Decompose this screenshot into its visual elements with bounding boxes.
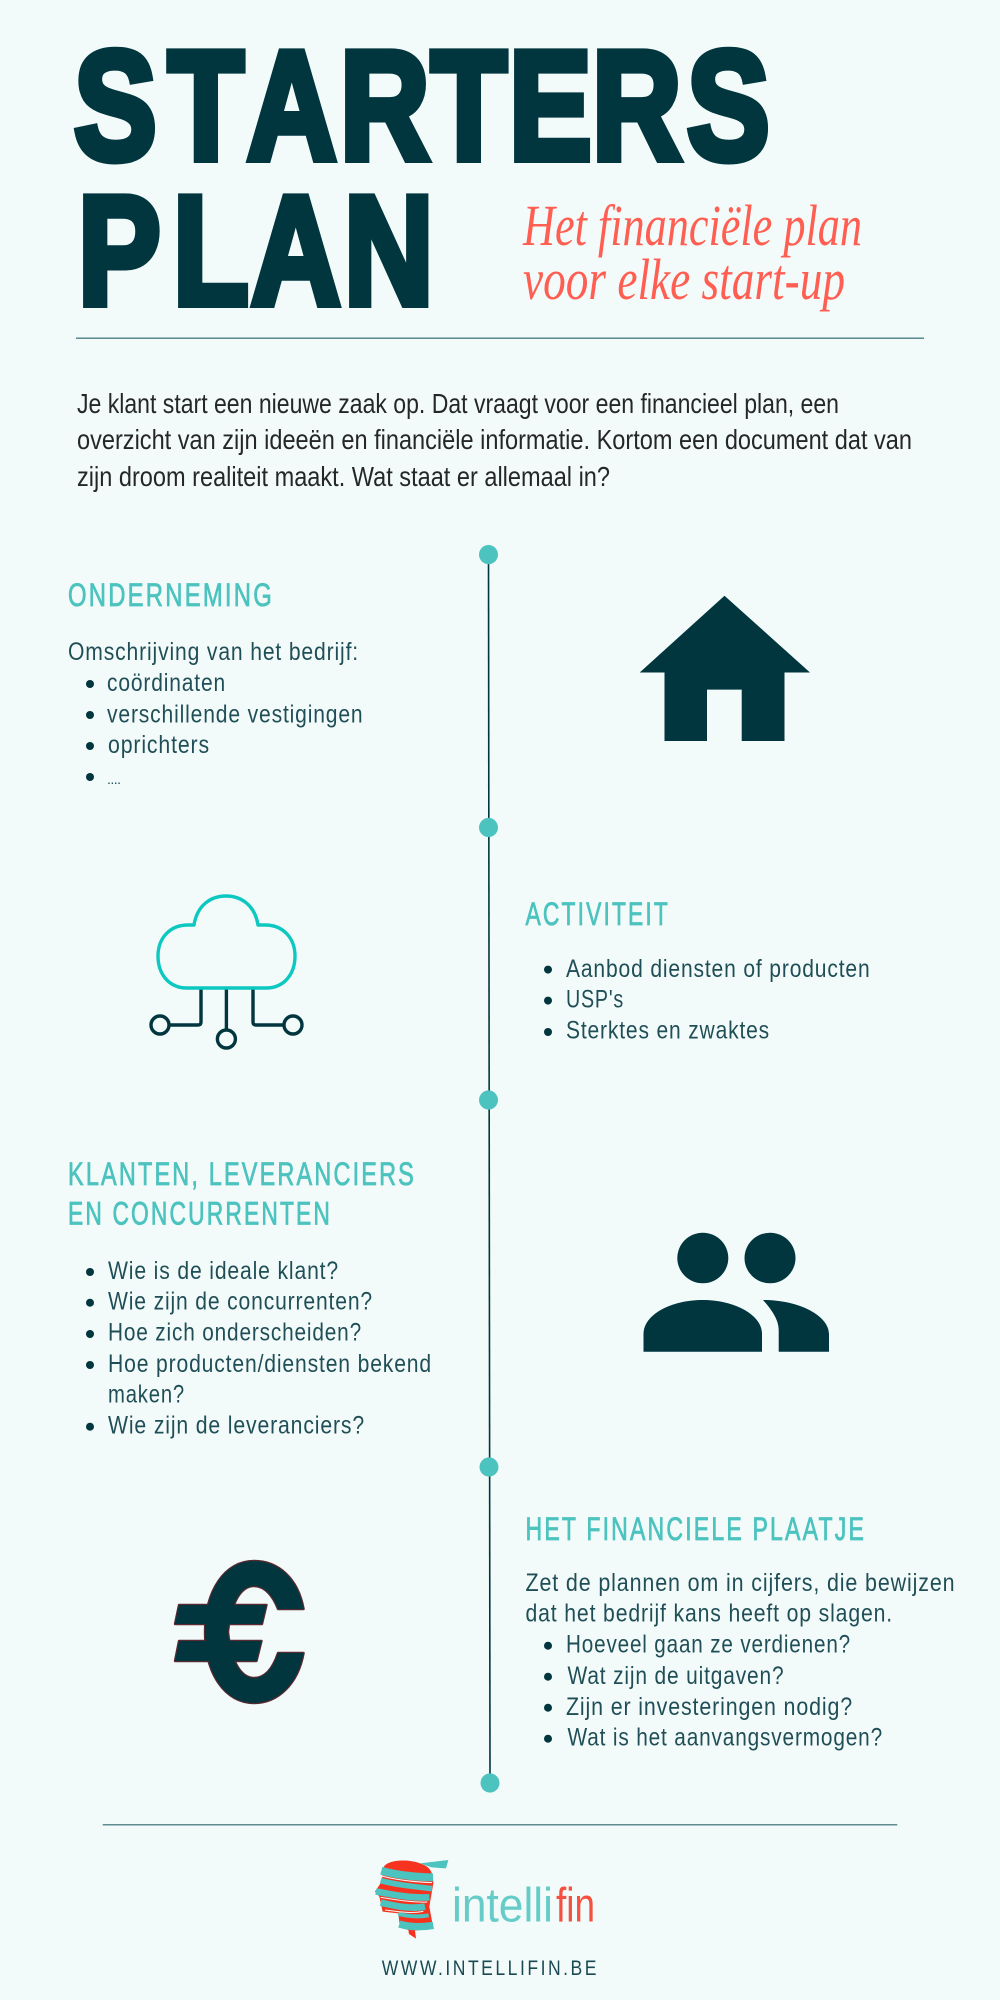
intro text: Je klant start een nieuwe zaak op. Dat vraagt voor een financieel plan, een <box>77 388 839 419</box>
heading: onderneming: ONDERNEMING <box>68 577 274 613</box>
list: activiteit: USP's <box>566 986 624 1014</box>
heading: klanten: EN CONCURRENTEN <box>68 1196 332 1232</box>
subtitle <box>522 193 862 312</box>
timeline dot 1 <box>479 545 498 564</box>
icon: people <box>644 1233 829 1352</box>
list: onderneming: coördinaten <box>107 669 226 697</box>
text: financieel <box>526 1569 956 1628</box>
timeline dot 3 <box>479 1090 498 1110</box>
intro text <box>77 388 912 492</box>
text: omschrijving: Omschrijving van het bedrijf: <box>68 638 359 666</box>
list: onderneming <box>86 669 364 787</box>
heading: financieel: HET FINANCIELE PLAATJE <box>526 1511 866 1547</box>
list: onderneming: verschillende vestigingen <box>107 700 364 728</box>
wordmark: fin <box>556 1880 595 1933</box>
panel: onderneming <box>68 577 364 787</box>
footer divider <box>103 1824 897 1826</box>
list: klanten <box>86 1257 432 1439</box>
timeline dot 2 <box>479 818 498 837</box>
list: klanten: Hoe producten/diensten bekend <box>108 1350 432 1378</box>
wordmark: intelli <box>452 1880 553 1933</box>
timeline dot 4 <box>480 1457 498 1477</box>
list: financieel: Wat is het aanvangsvermogen? <box>568 1724 883 1752</box>
title: STARTERS <box>74 19 770 192</box>
header divider <box>76 338 924 339</box>
list: activiteit: Sterktes en zwaktes <box>566 1017 770 1045</box>
timeline <box>479 545 500 1793</box>
list: financieel: Hoeveel gaan ze verdienen? <box>566 1631 851 1659</box>
panel: klanten, leveranciers en concurrenten <box>68 1156 432 1439</box>
list: financieel: Wat zijn de uitgaven? <box>568 1662 784 1690</box>
list: activiteit <box>544 955 870 1045</box>
list: financieel: Zijn er investeringen nodig? <box>566 1693 853 1721</box>
timeline dot 5 <box>480 1773 500 1793</box>
list: klanten: Wie zijn de concurrenten? <box>108 1288 373 1316</box>
list: klanten: maken? <box>108 1381 185 1409</box>
list: onderneming: .... <box>107 771 122 787</box>
panel: activiteit <box>526 896 870 1045</box>
list: klanten: Wie is de ideale klant? <box>108 1257 339 1285</box>
title: PLAN <box>78 164 434 337</box>
title <box>74 19 770 337</box>
heading: klanten <box>68 1156 416 1232</box>
icon: euro <box>175 1561 304 1703</box>
list: financieel <box>544 1631 883 1752</box>
subtitle: voor elke start-up <box>523 247 845 312</box>
heading: activiteit: ACTIVITEIT <box>526 896 670 932</box>
list: activiteit: Aanbod diensten of producten <box>566 955 870 983</box>
website url: WWW.INTELLIFIN.BE <box>382 1957 599 1980</box>
list: klanten: Wie zijn de leveranciers? <box>108 1411 365 1439</box>
list: klanten: Hoe zich onderscheiden? <box>108 1319 362 1347</box>
intro text: zijn droom realiteit maakt. Wat staat er allemaal in? <box>77 461 610 492</box>
heading: klanten: KLANTEN, LEVERANCIERS <box>68 1156 416 1192</box>
icon: cloud network <box>151 896 302 1048</box>
text: financieel: dat het bedrijf kans heeft op slagen. <box>526 1600 893 1628</box>
panel: het financiele plaatje <box>526 1511 956 1752</box>
icon: ribbon head <box>375 1860 448 1939</box>
subtitle: Het financiële plan <box>522 193 862 258</box>
logo: intellifin <box>375 1860 595 1939</box>
icon: house <box>640 596 810 741</box>
list: onderneming: oprichters <box>108 731 210 759</box>
